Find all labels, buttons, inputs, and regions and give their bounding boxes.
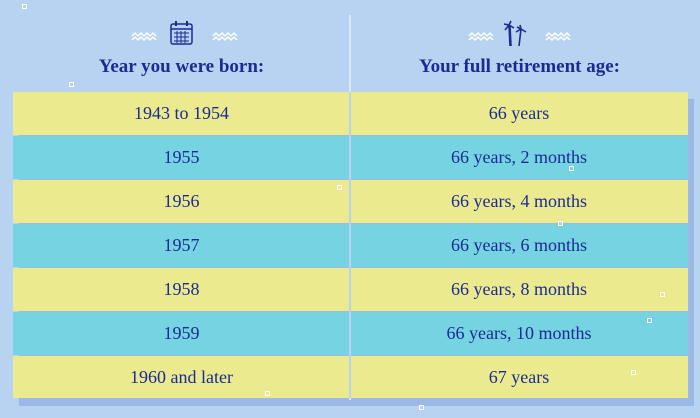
vertical divider xyxy=(349,15,351,400)
heading: year born: Year you were born: xyxy=(99,56,264,77)
row 1960: 67 years xyxy=(489,366,549,386)
row 1955: 1955 xyxy=(164,147,200,167)
icon: calendar with waves xyxy=(132,21,238,45)
row 1943 xyxy=(13,92,688,135)
table divider over rows xyxy=(349,92,351,398)
row 1956: 66 years, 4 months xyxy=(451,191,587,211)
row 1960 xyxy=(13,356,688,398)
row 1959: 66 years, 10 months xyxy=(446,323,591,343)
row 1959: 1959 xyxy=(164,323,200,343)
row 1959 xyxy=(13,312,688,355)
row 1955 xyxy=(13,136,688,179)
row 1958: 66 years, 8 months xyxy=(451,279,587,299)
row 1957: 66 years, 6 months xyxy=(451,235,587,255)
row 1957: 1957 xyxy=(164,235,200,255)
row 1960: 1960 and later xyxy=(130,366,233,386)
row 1943: 66 years xyxy=(489,103,549,123)
row 1943: 1943 to 1954 xyxy=(134,103,229,123)
row 1955: 66 years, 2 months xyxy=(451,147,587,167)
heading: retirement age: Your full retirement age: xyxy=(419,56,620,77)
row 1956: 1956 xyxy=(164,191,200,211)
row 1956 xyxy=(13,180,688,223)
row 1958: 1958 xyxy=(164,279,200,299)
icon: palm trees with waves xyxy=(468,20,570,46)
table shadow xyxy=(19,99,694,406)
row 1958 xyxy=(13,268,688,311)
decorative dots xyxy=(22,4,27,9)
row 1957 xyxy=(13,224,688,267)
